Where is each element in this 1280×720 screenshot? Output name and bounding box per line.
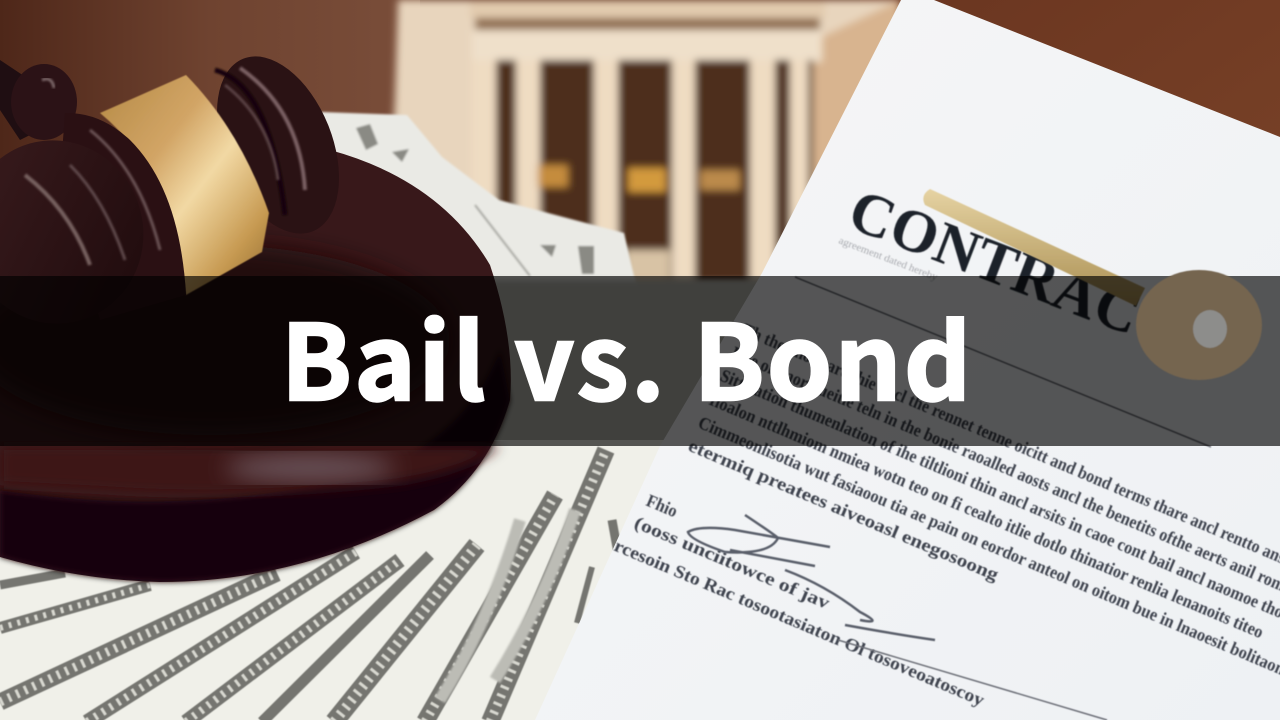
gavel right cap [193,39,363,251]
sound block dark in band [0,245,450,435]
sound block highlight [225,454,395,482]
sound block [0,150,511,582]
money behind the gavel [321,112,700,450]
contract body text: Fhio [643,490,681,521]
money in front [0,440,670,720]
contract subheading: agreement dated hereby [837,235,940,284]
gavel left collar [60,113,186,320]
contract paper [535,0,1280,720]
gavel [0,39,363,347]
sound block lip [0,446,500,494]
wood background [0,0,1280,300]
contract body text: (ooss unciitowce of jav [631,512,833,614]
contract heading: CONTRAC [840,177,1150,348]
sound block lower shadow [0,350,510,582]
money fan [0,112,770,720]
gavel handle [0,60,77,140]
title: Bail vs. Bond [281,279,971,430]
brass key shaft [923,189,1145,306]
contract rule lines [795,277,1211,720]
brass key bow [1136,270,1262,380]
title band [0,270,1280,446]
gavel left cap [0,117,167,347]
signature [688,515,935,640]
money in the band [480,280,770,450]
contract body text: etermiq preatees aiveoasl enegosoong [685,435,1002,585]
courthouse [385,0,900,290]
gavel gold band [100,75,269,295]
contract body text: rcesoin Sto Rac tosootasiaton Ol tosoveoatoscoy [611,535,987,710]
contract body text [611,319,1280,710]
